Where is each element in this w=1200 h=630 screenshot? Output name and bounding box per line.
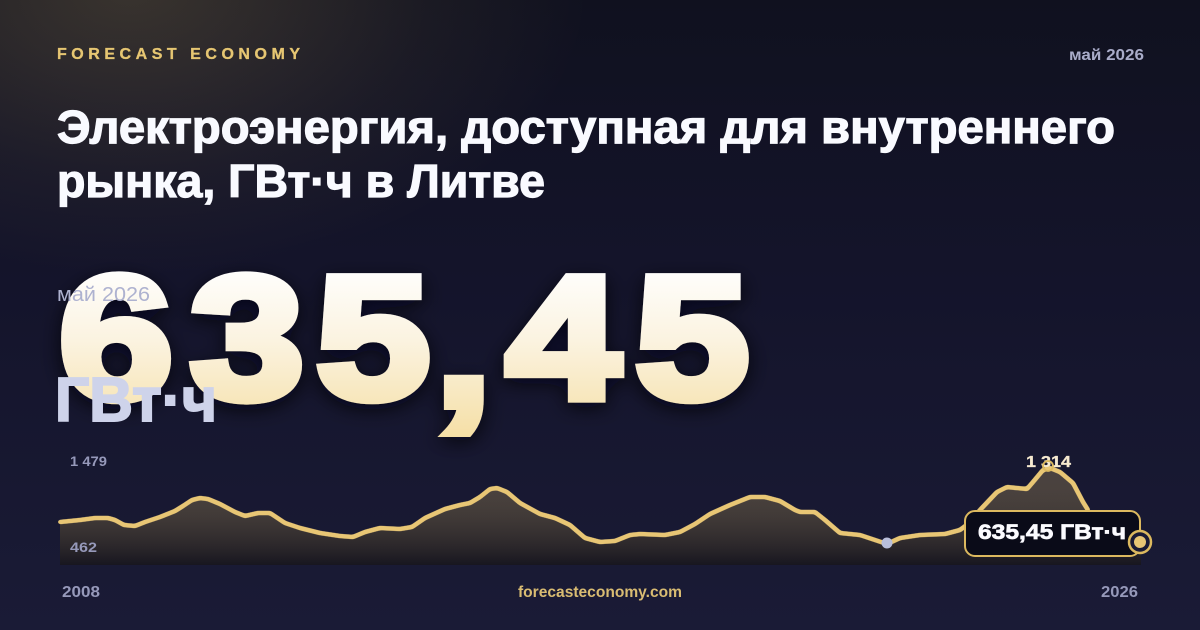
start year: 2008 bbox=[62, 584, 100, 601]
chart bbox=[60, 454, 1151, 565]
brand label: FORECAST ECONOMY bbox=[57, 46, 300, 63]
axis max label: 1 479 bbox=[70, 454, 107, 469]
end year: 2026 bbox=[1101, 584, 1138, 601]
minimum marker bbox=[882, 538, 892, 548]
area under line bbox=[60, 468, 1141, 565]
big value: 635,45 bbox=[59, 240, 749, 443]
title: рынка, ГВт·ч в Литве bbox=[57, 155, 545, 207]
date under value: май 2026 bbox=[57, 284, 150, 306]
title: Электроэнергия, доступная для внутреннего bbox=[57, 101, 1115, 153]
line bbox=[60, 468, 1088, 544]
title bbox=[57, 101, 1115, 207]
axis min label: 462 bbox=[70, 540, 97, 555]
peak label: 1 314 bbox=[1026, 454, 1071, 471]
current value marker bbox=[1129, 531, 1151, 553]
unit: ГВт·ч bbox=[55, 366, 217, 435]
callout bbox=[965, 511, 1140, 556]
peak marker bbox=[1043, 461, 1053, 471]
source link: forecasteconomy.com bbox=[518, 584, 682, 601]
callout: 635,45 ГВт·ч bbox=[978, 520, 1126, 544]
date top right: май 2026 bbox=[1069, 47, 1144, 64]
